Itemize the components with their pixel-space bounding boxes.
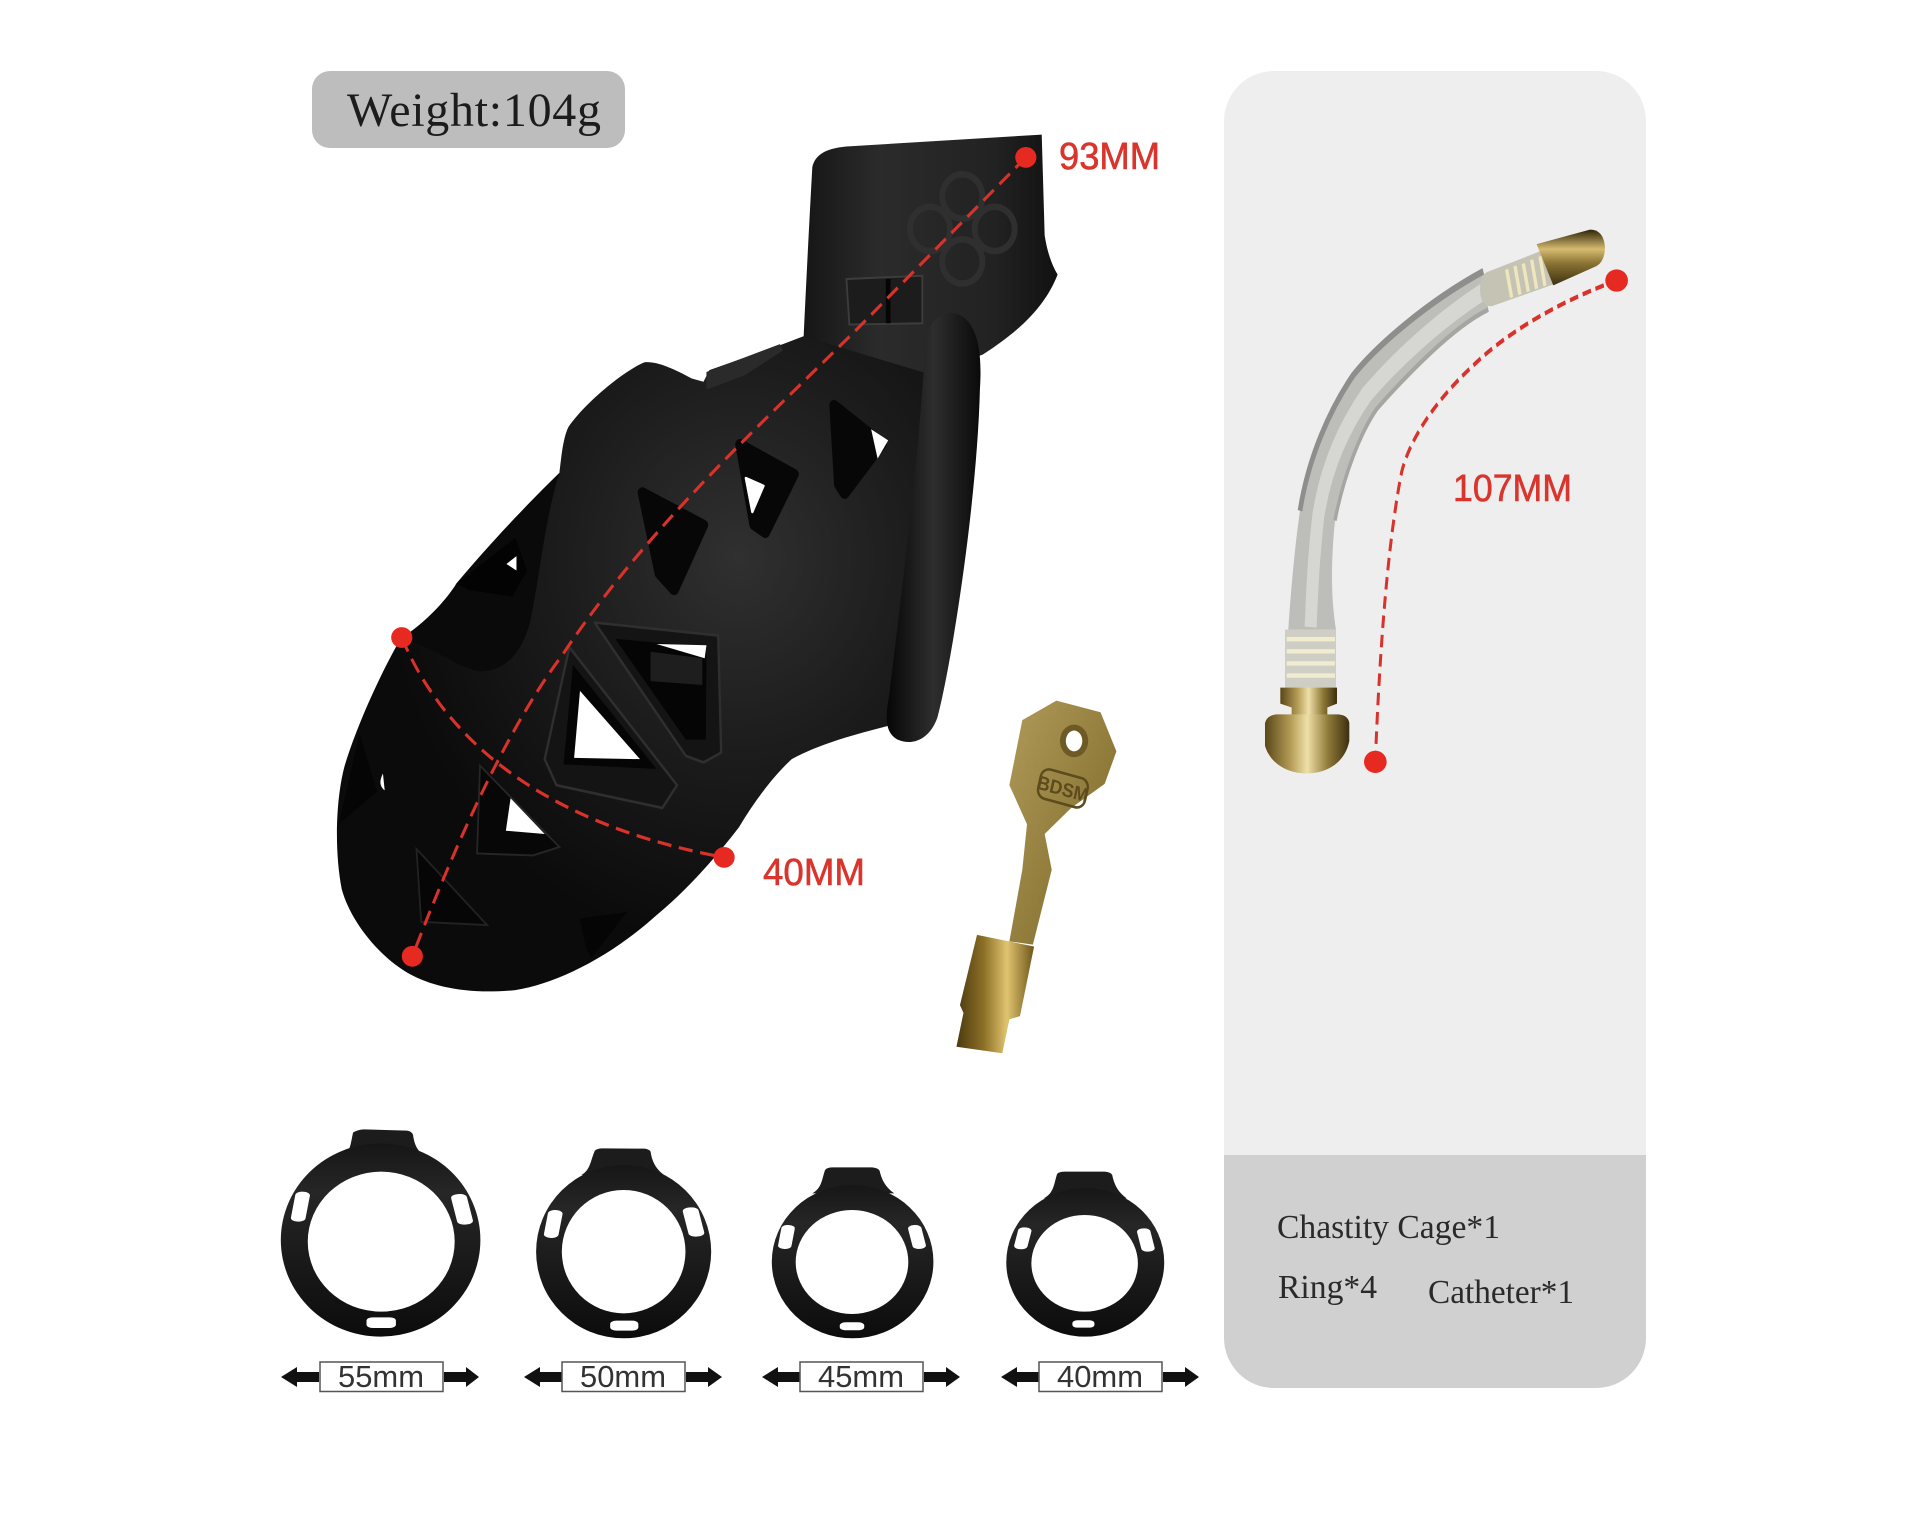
size label: 45mm xyxy=(762,1359,960,1394)
framed window: large triangle xyxy=(545,647,677,808)
triangle vent 3 xyxy=(834,405,888,494)
framed window: upper block xyxy=(595,623,721,762)
triangle vent 2 xyxy=(740,444,794,533)
gold tip xyxy=(1537,230,1605,285)
gold cap xyxy=(1265,714,1349,773)
ring 45mm xyxy=(772,1167,933,1338)
triangle vent 5 xyxy=(416,849,487,925)
size label: 40mm xyxy=(1001,1359,1199,1394)
cage connector xyxy=(803,135,1058,375)
panel: catheter background xyxy=(1224,71,1646,1388)
top clip xyxy=(706,344,783,390)
size label: 55mm: 55mm xyxy=(338,1359,424,1394)
icon: key xyxy=(956,701,1116,1053)
upper side window xyxy=(456,538,527,597)
upper shell shadow xyxy=(401,473,559,671)
faint logo xyxy=(910,174,1015,284)
cage main body xyxy=(337,336,933,991)
size label: 50mm: 50mm xyxy=(580,1359,666,1394)
package contents text: Catheter*1 xyxy=(1428,1274,1574,1311)
panel: package contents background xyxy=(1224,1155,1646,1388)
measurement dots xyxy=(1364,269,1628,773)
label: 93MM: 93MM xyxy=(1059,136,1160,178)
catheter illustration xyxy=(1265,230,1628,773)
icon: key: BDSM xyxy=(1035,771,1090,806)
package contents text: Chastity Cage*1 xyxy=(1277,1209,1500,1246)
label: 107MM: 107MM xyxy=(1453,468,1572,510)
size label: 55mm xyxy=(281,1359,479,1394)
gold collar xyxy=(1280,688,1337,717)
threaded base section xyxy=(1285,630,1336,689)
triangle vent 1 xyxy=(642,492,704,590)
cage illustration xyxy=(337,135,1058,991)
ring 50mm xyxy=(536,1148,711,1338)
measurement dots xyxy=(391,147,1036,967)
catheter tube xyxy=(1288,271,1488,630)
package contents text xyxy=(1277,1209,1574,1311)
weight badge: Weight:104g xyxy=(347,84,601,137)
ring 40mm xyxy=(1006,1172,1164,1337)
latch window xyxy=(846,276,922,325)
40mm dashed line xyxy=(402,637,724,857)
side vents xyxy=(339,733,627,958)
93mm dashed line xyxy=(412,157,1026,956)
size label: 50mm xyxy=(524,1359,722,1394)
threaded tip section xyxy=(1480,248,1555,306)
label: 40MM: 40MM xyxy=(763,852,865,894)
size label: 45mm: 45mm xyxy=(818,1359,904,1394)
size label: 40mm: 40mm xyxy=(1057,1359,1143,1394)
package contents text: Ring*4 xyxy=(1278,1269,1377,1306)
rings row xyxy=(281,1129,1164,1338)
107mm dashed line xyxy=(1375,281,1617,762)
weight badge xyxy=(312,71,625,148)
triangle vent 4 xyxy=(477,766,559,855)
thick rim band xyxy=(887,313,981,742)
ring 55mm xyxy=(281,1129,480,1337)
